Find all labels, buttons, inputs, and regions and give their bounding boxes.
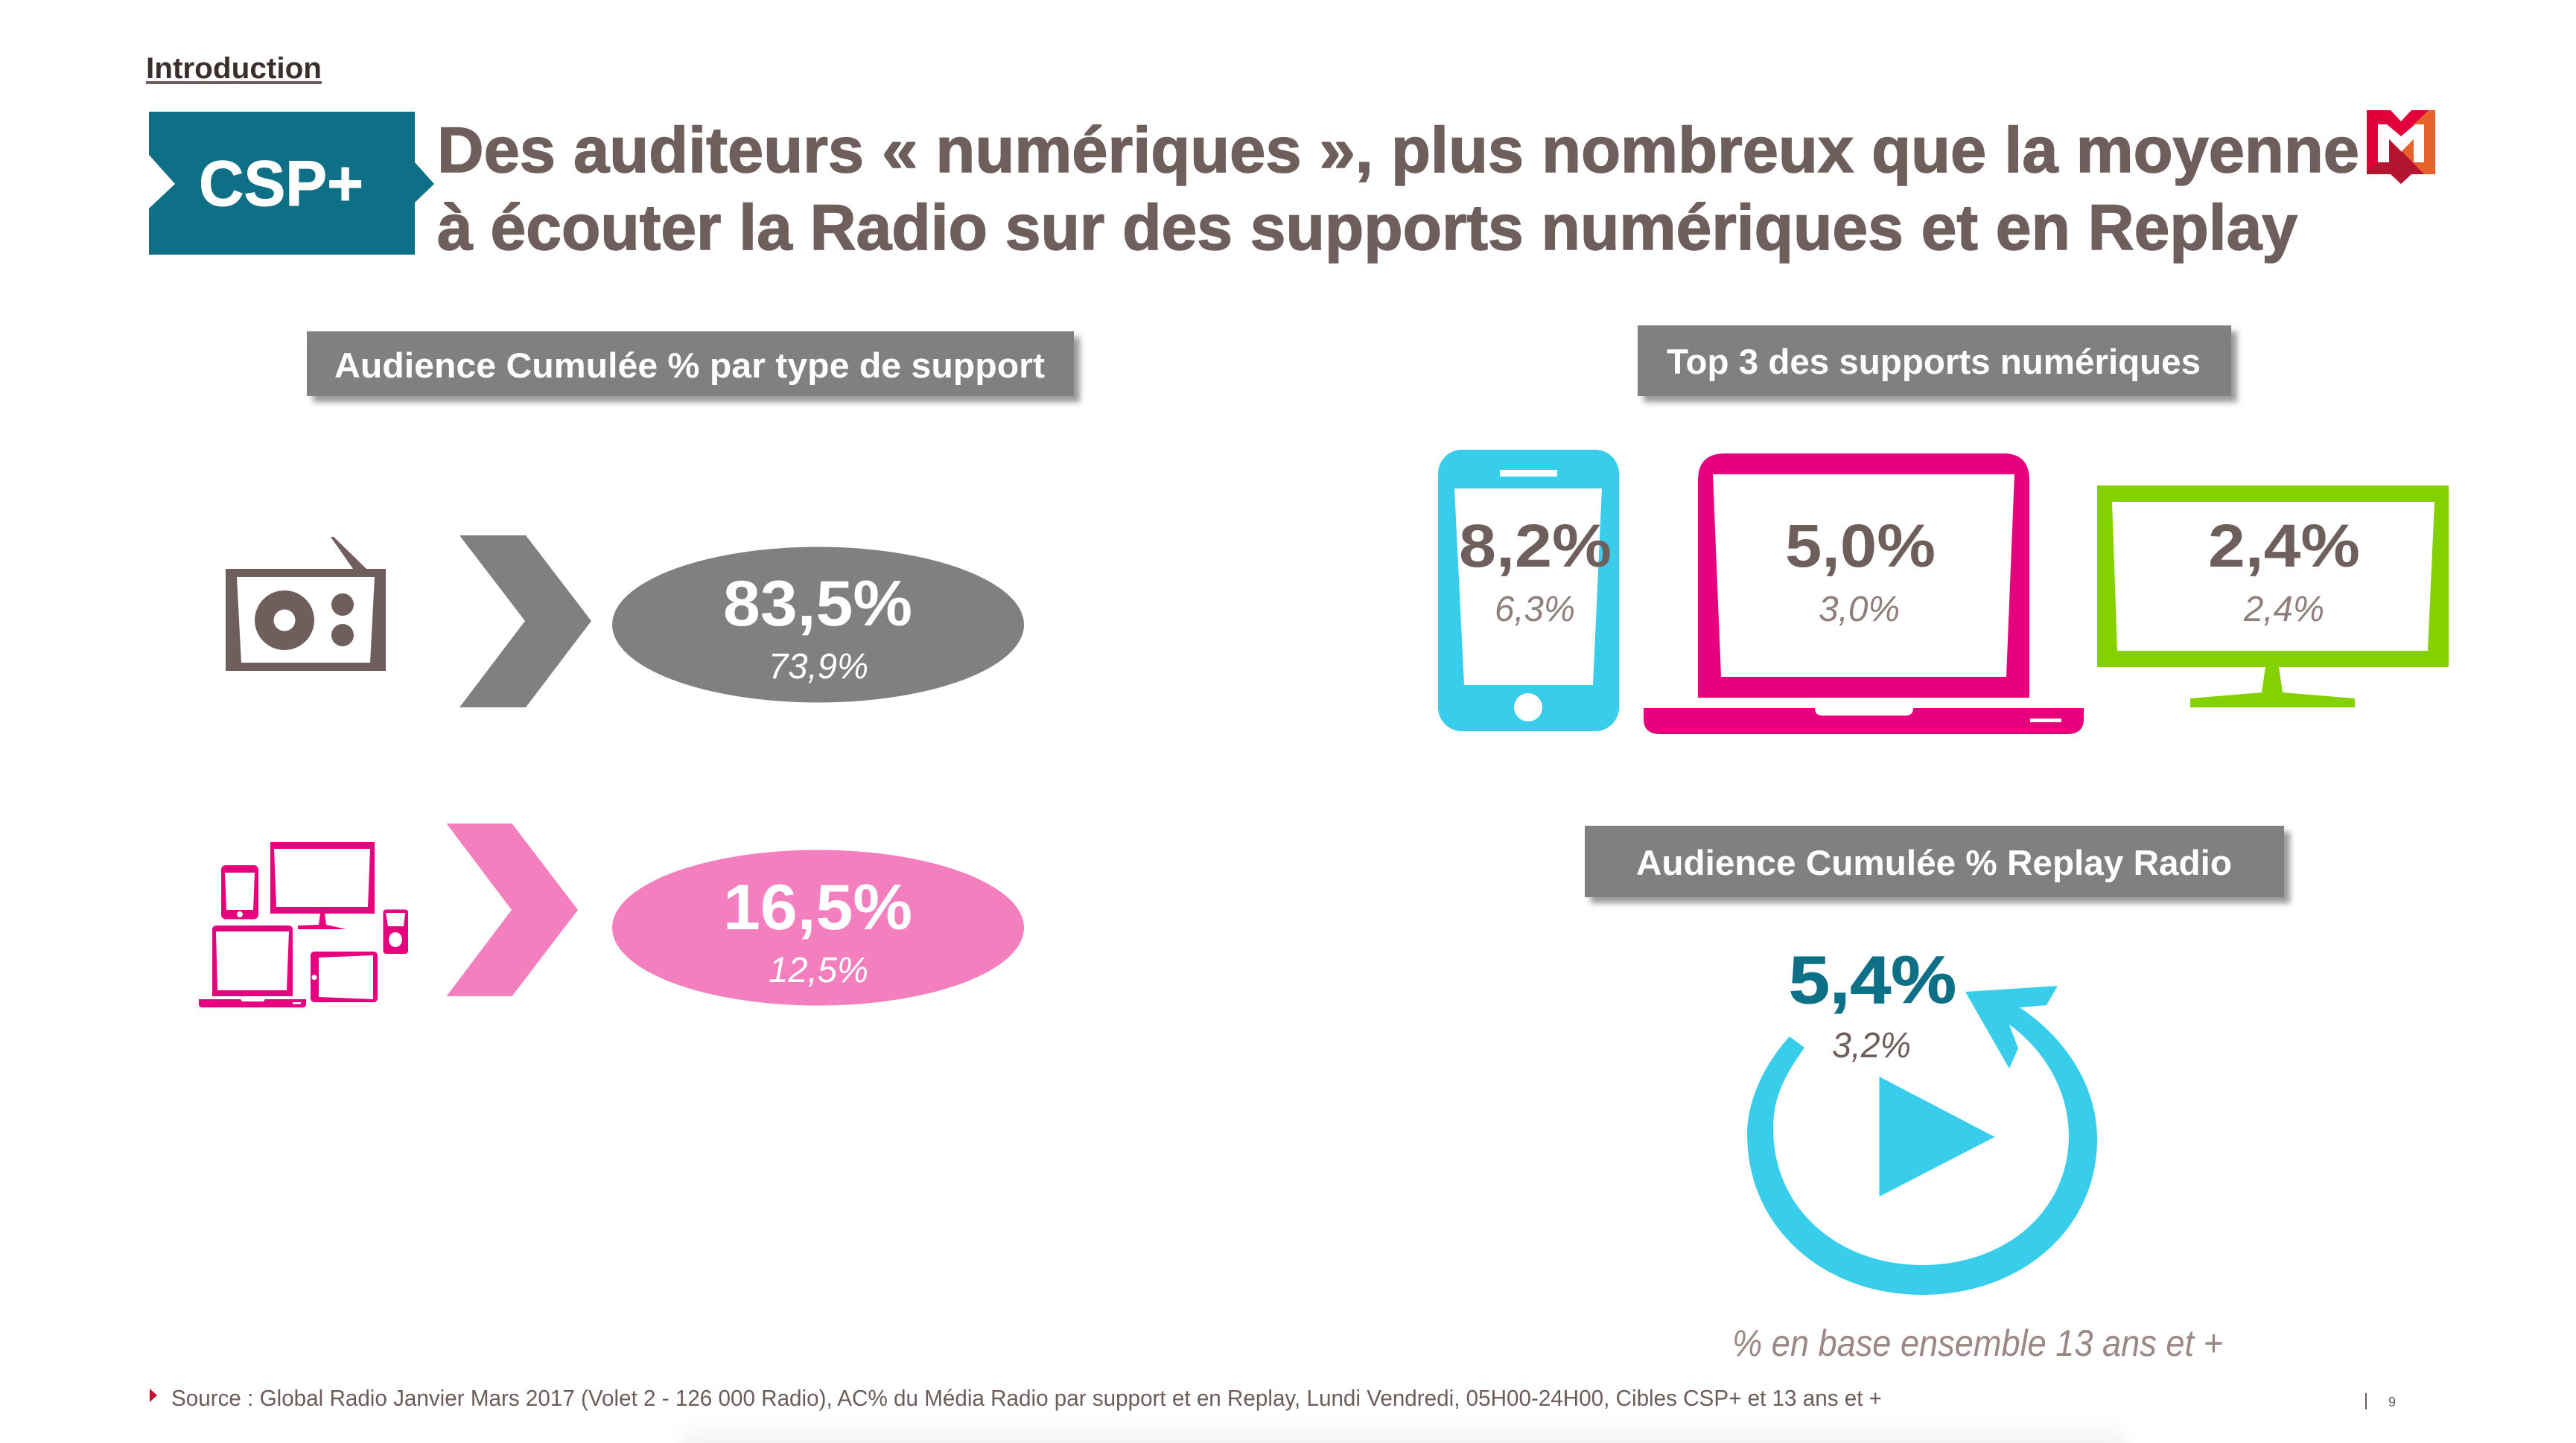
icon: monitor [2097, 485, 2449, 707]
arrow: grey chevron [459, 535, 591, 707]
heading: Top 3 des supports numériques: Top 3 des supports numériques [1667, 342, 2201, 381]
note: base: % en base ensemble 13 ans et + [1732, 1322, 2223, 1364]
source line: Source : Global Radio Janvier Mars 2017 (Volet 2 - 126 000 Radio), AC% du Média Radio par support et en Replay, Lundi Vendredi, 05H00-24H00, Cibles CSP+ et 13 ans et + [171, 1385, 1882, 1411]
value ellipse: digital [612, 850, 1024, 1005]
value ellipse: radio: 83,5% [723, 568, 912, 640]
panel: monitor [2097, 485, 2449, 707]
title: à écouter la Radio sur des supports numériques et en Replay [437, 192, 2297, 264]
value ellipse: digital: 12,5% [769, 951, 868, 990]
page number: 9 [2388, 1395, 2396, 1409]
title: Des auditeurs « numériques », plus nombreux que la moyenne [437, 115, 2359, 186]
icon: laptop [1644, 453, 2084, 734]
section label: Introduction: Introduction [146, 52, 322, 85]
value: smartphone: 6,3% [1495, 590, 1575, 629]
value ellipse: radio [612, 547, 1024, 703]
badge: CSP+ [149, 112, 434, 255]
value: laptop [1785, 512, 1936, 629]
value: replay: 3,2% [1832, 1026, 1911, 1065]
heading: Audience Cumulée % Replay Radio: Audience Cumulée % Replay Radio [1636, 843, 2232, 882]
value: replay: 5,4% [1789, 943, 1956, 1018]
panel: radio row [226, 535, 1024, 707]
value: laptop: 3,0% [1819, 590, 1900, 629]
heading: Audience Cumulée % par type de support [307, 331, 1080, 402]
badge: CSP+: CSP+ [199, 148, 363, 220]
value: smartphone [1459, 512, 1612, 629]
heading: Audience Cumulée % Replay Radio [1585, 826, 2290, 903]
value: monitor [2208, 512, 2360, 629]
value: smartphone: 8,2% [1459, 512, 1612, 580]
icon: play triangle [1880, 1077, 1994, 1197]
panel: digital row [199, 824, 1024, 1007]
heading: Top 3 des supports numériques [1638, 325, 2237, 402]
value: laptop: 5,0% [1785, 512, 1936, 580]
value: monitor: 2,4% [2208, 512, 2360, 580]
arrow: pink chevron [447, 824, 578, 996]
icon: circular replay arrow [1747, 986, 2097, 1295]
panel: laptop [1644, 453, 2084, 734]
icon: radio [226, 537, 386, 671]
value: monitor: 2,4% [2243, 590, 2324, 629]
page number [2365, 1393, 2396, 1409]
panel: replay [1747, 943, 2097, 1295]
value ellipse: radio: 73,9% [769, 647, 868, 687]
panel: smartphone [1438, 450, 1619, 731]
title [437, 115, 2359, 264]
heading: Audience Cumulée % par type de support: Audience Cumulée % par type de support [334, 345, 1045, 385]
value ellipse: digital: 16,5% [723, 872, 912, 943]
icon: smartphone [1438, 450, 1619, 731]
icon: M logo [2367, 110, 2435, 184]
icon: digital devices [199, 842, 408, 1007]
value: replay [1789, 943, 1956, 1065]
